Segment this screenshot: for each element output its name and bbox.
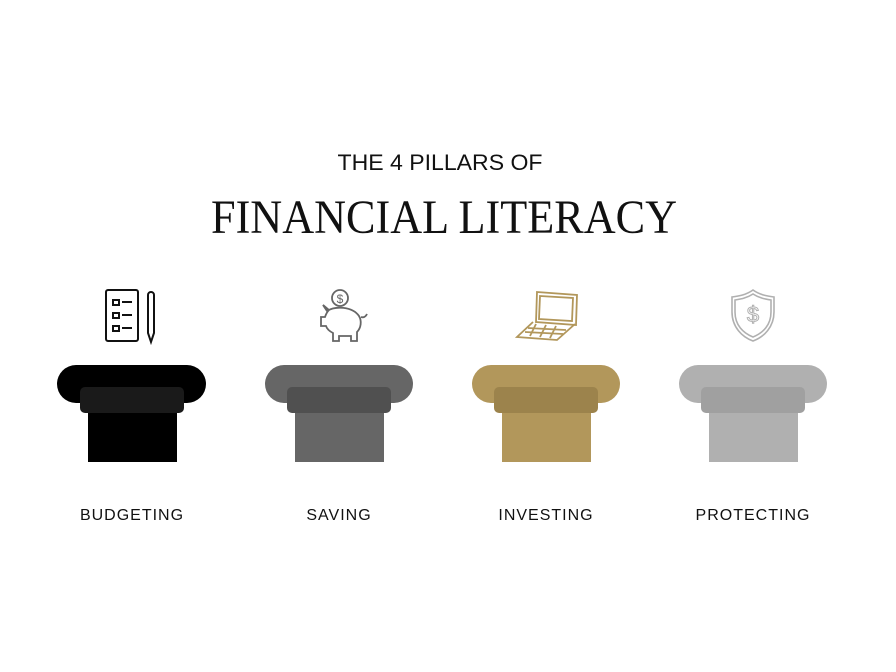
icon: piggy bank: $ <box>337 292 344 306</box>
subtitle: THE 4 PILLARS OF <box>338 150 542 175</box>
pillar: budgeting <box>57 365 206 462</box>
pillar: saving <box>265 365 413 462</box>
icon: piggy bank <box>321 290 367 341</box>
title: FINANCIAL LITERACY <box>211 191 677 244</box>
label: investing: INVESTING <box>498 507 594 524</box>
icon: budget checklist <box>106 290 154 342</box>
icon: laptop <box>517 292 577 340</box>
pillar: investing <box>472 365 620 462</box>
pillar: protecting <box>679 365 827 462</box>
label: protecting: PROTECTING <box>696 507 810 524</box>
label: budgeting: BUDGETING <box>80 507 184 524</box>
icon: shield <box>732 290 774 341</box>
label: saving: SAVING <box>306 507 372 524</box>
icon: shield: $ <box>747 302 759 327</box>
